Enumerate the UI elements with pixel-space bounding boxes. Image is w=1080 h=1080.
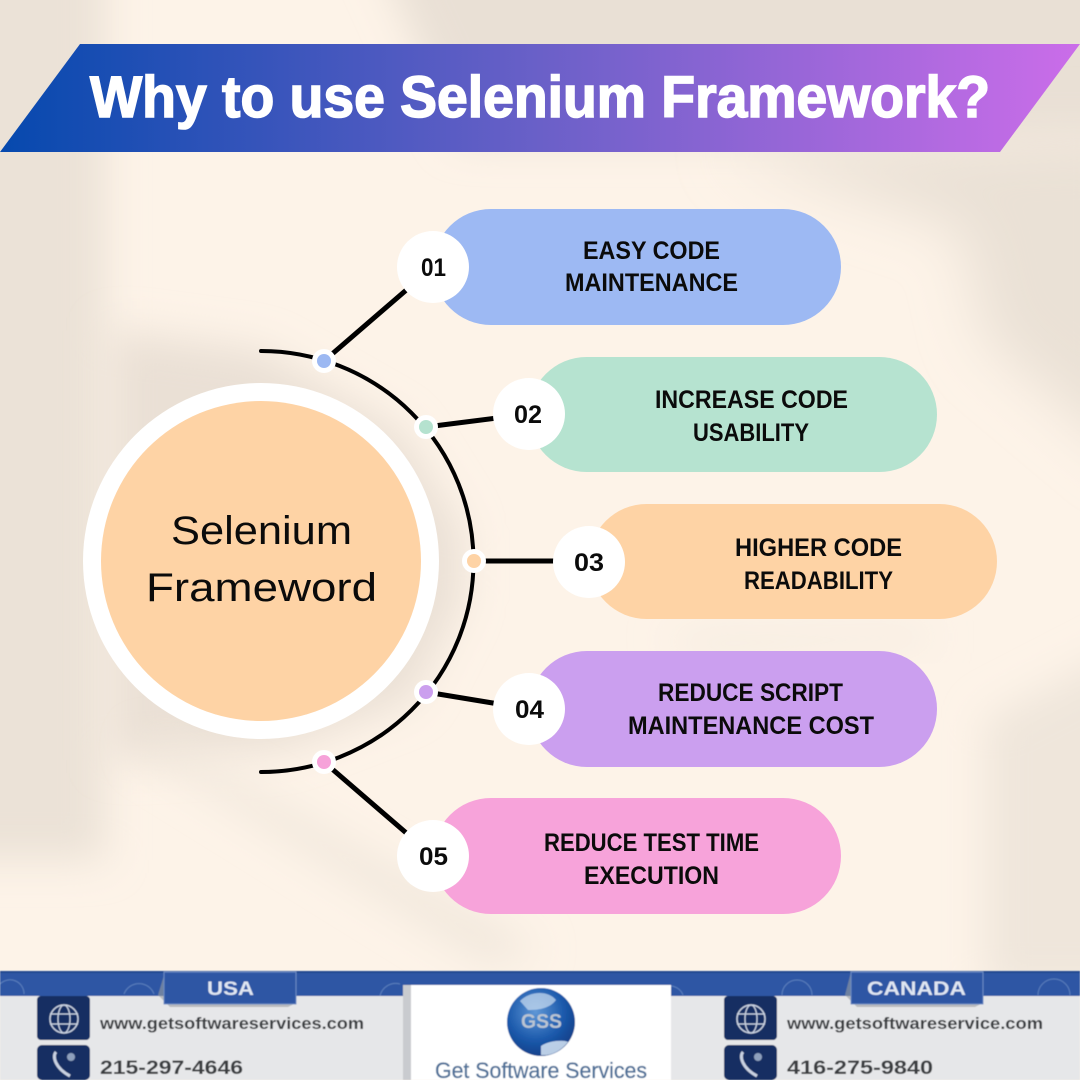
title: Why to use Selenium Framework?	[90, 65, 990, 130]
panel: Canada contact: www.getsoftwareservice.com	[786, 1014, 1043, 1033]
connecting arc	[261, 351, 474, 772]
icon: globe logo: GSS	[521, 1011, 562, 1033]
panel: USA contact: USA	[207, 979, 254, 1000]
item 05: reduce test time execution	[312, 750, 841, 914]
item 03: higher code readability	[462, 504, 997, 619]
panel: Canada contact: 416-275-9840	[787, 1058, 933, 1079]
icon: globe	[37, 996, 90, 1040]
panel: logo	[411, 985, 671, 1080]
item 05: reduce test time execution: REDUCE TEST TIME	[544, 829, 759, 857]
central circle: Selenium Frameword	[83, 383, 439, 739]
item 02: increase code usability	[414, 357, 937, 472]
panel: Canada contact	[724, 972, 1043, 1080]
item 05: reduce test time execution: 05	[419, 843, 448, 871]
item 03: higher code readability: HIGHER CODE	[735, 534, 902, 562]
icon: globe logo	[507, 988, 575, 1056]
footer	[0, 971, 1080, 1080]
item 01: easy code maintenance: MAINTENANCE	[565, 269, 738, 297]
item 04: reduce script maintenance cost: MAINTENANCE COST	[628, 712, 874, 740]
central circle: Selenium Frameword: Selenium	[171, 509, 352, 553]
item 01: easy code maintenance: 01	[421, 254, 446, 282]
icon: phone	[724, 1045, 777, 1080]
item 03: higher code readability: READABILITY	[744, 567, 893, 595]
panel: USA contact	[37, 972, 411, 1080]
item 03: higher code readability: 03	[574, 549, 604, 577]
icon: phone	[37, 1045, 90, 1080]
item 05: reduce test time execution: EXECUTION	[584, 862, 719, 890]
item 04: reduce script maintenance cost: 04	[515, 696, 544, 724]
panel: USA contact: 215-297-4646	[100, 1058, 243, 1079]
item 04: reduce script maintenance cost	[414, 651, 937, 767]
item 02: increase code usability: INCREASE CODE	[655, 386, 848, 414]
icon: globe	[724, 996, 777, 1040]
item 01: easy code maintenance: EASY CODE	[583, 237, 720, 265]
panel: USA contact: www.getsoftwareservices.com	[99, 1014, 364, 1033]
item 02: increase code usability: 02	[514, 401, 542, 429]
panel: Canada contact: CANADA	[867, 979, 966, 1000]
central circle: Selenium Frameword: Frameword	[146, 566, 377, 610]
title banner	[0, 44, 1080, 152]
item 01: easy code maintenance	[312, 209, 841, 373]
item 02: increase code usability: USABILITY	[693, 419, 809, 447]
item 04: reduce script maintenance cost: REDUCE SCRIPT	[658, 679, 843, 707]
